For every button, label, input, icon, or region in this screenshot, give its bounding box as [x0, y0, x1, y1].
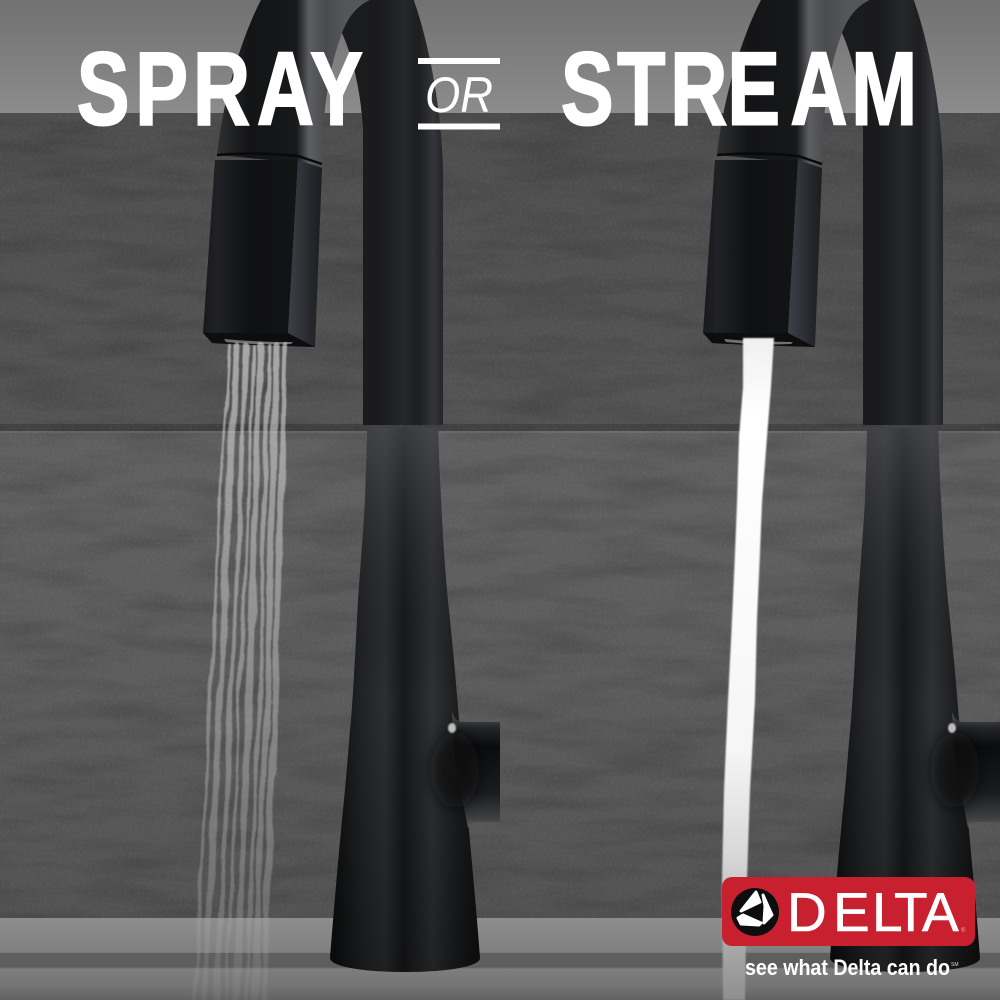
logo wordmark: DELTA: [787, 881, 959, 943]
icon: Delta triangle mark: [731, 888, 779, 936]
divider: OR with rules: [418, 58, 500, 130]
logo: Delta badge: [722, 877, 975, 946]
registered mark: ®: [961, 927, 966, 934]
tagline: see what Delta can do: [745, 955, 950, 980]
faucet: left: [203, 0, 510, 972]
background wall: right: [500, 0, 1000, 1000]
service mark: SM: [951, 962, 958, 968]
panel: stream (right half): [500, 0, 1000, 1000]
spray water: [195, 345, 285, 1000]
stream water: [722, 338, 774, 1000]
word: OR: OR: [425, 67, 493, 123]
title: SPRAY: SPRAY: [77, 30, 363, 147]
background wall: left: [0, 0, 500, 1000]
faucet: right: [703, 0, 1000, 972]
panel: spray (left half): [0, 0, 510, 1000]
title: STREAM: STREAM: [561, 30, 917, 147]
